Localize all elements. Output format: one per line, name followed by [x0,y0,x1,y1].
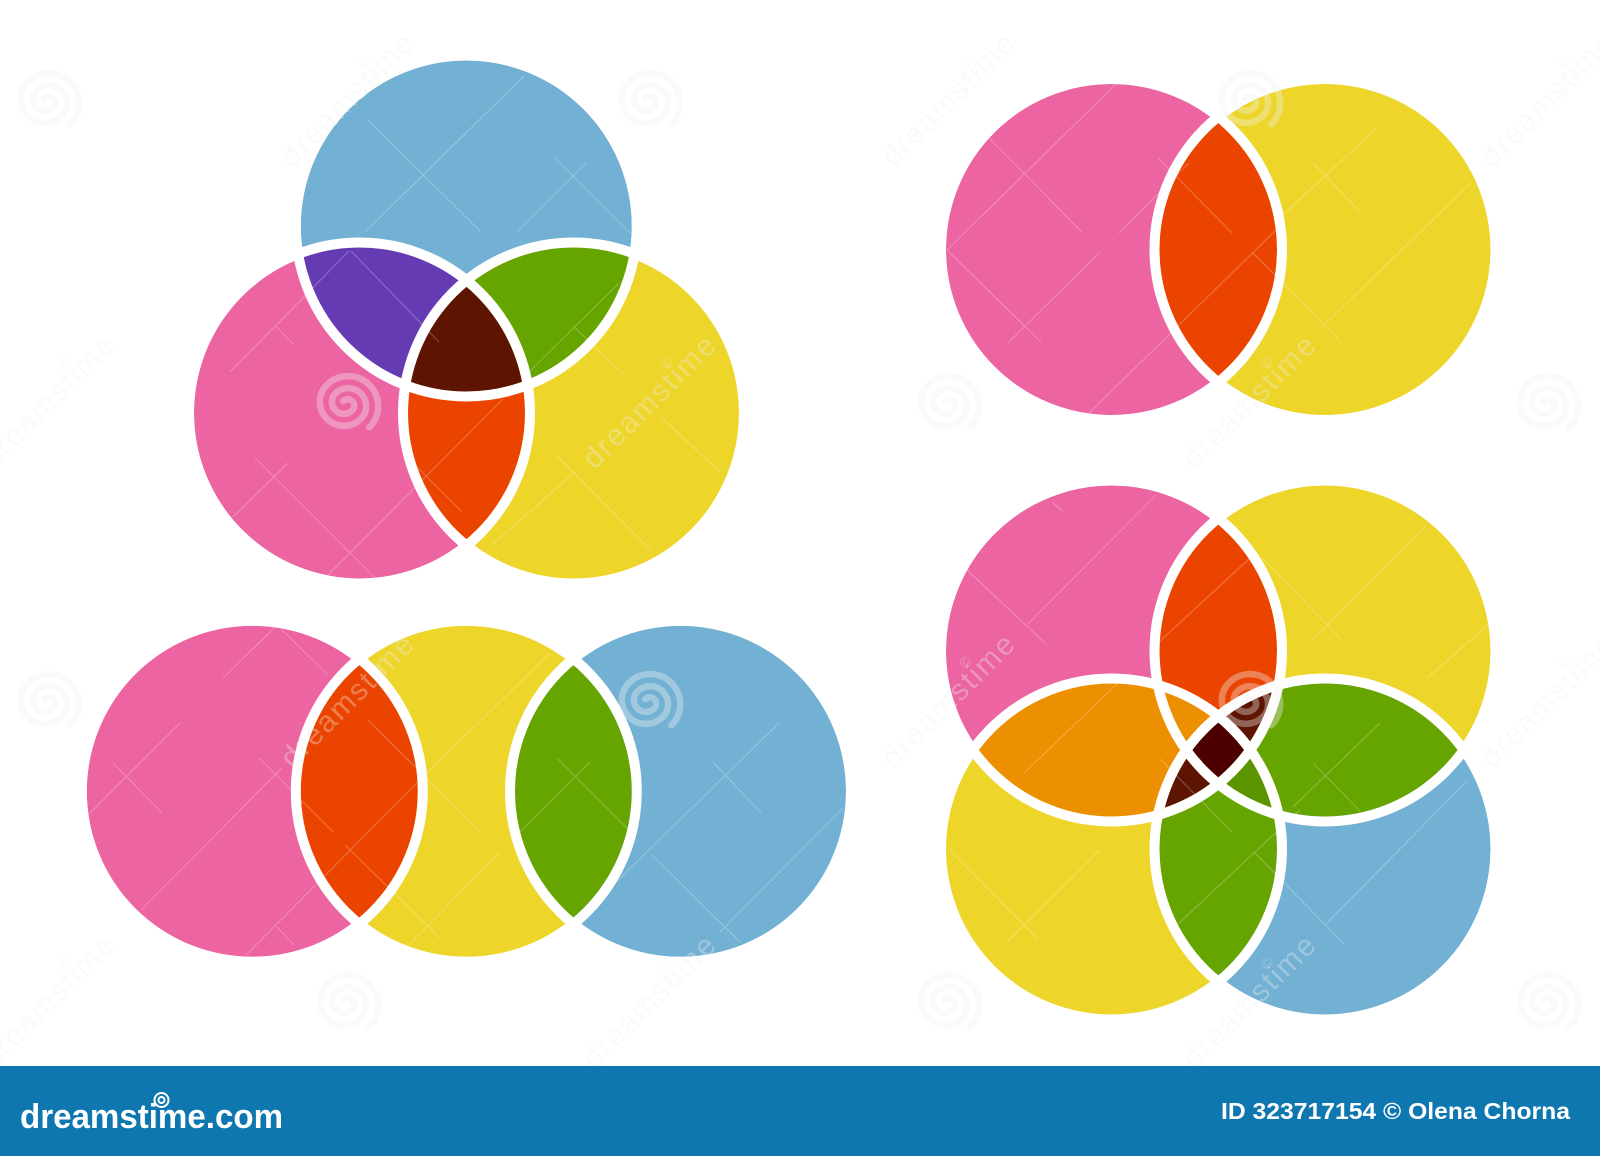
red-orange overlap [1160,123,1277,376]
red-orange overlap [408,287,525,539]
blue circle [301,60,632,392]
watermark text: dreamstime [576,329,722,475]
footer logo [20,1093,283,1136]
pink circle [946,84,1277,415]
green overlap [515,665,632,918]
watermark text: dreamstime [274,628,420,774]
watermark text: © [956,652,976,672]
yellow circle [408,248,739,578]
logo wordmark: dreamstime.com [20,1098,283,1136]
pink circle [87,626,418,957]
four-circle Venn diagram [941,480,1496,1020]
watermark text: dreamstime [1176,929,1322,1075]
watermark text: © [56,953,76,973]
footer banner [0,1066,1600,1156]
yellow circle [1160,84,1490,415]
watermark text: dreamstime [1176,329,1322,475]
watermark text: © [657,953,677,973]
watermark text: dreamstime [875,27,1021,173]
right green overlap [1226,684,1458,816]
south-east dark green overlap [1192,722,1272,808]
watermark text: dreamstime [274,27,420,173]
three-circle triangular Venn diagram [189,56,744,584]
watermark lines [90,76,1489,955]
watermark text: © [657,353,677,373]
green overlap [411,248,629,381]
south-west brown overlap [1165,750,1218,808]
watermark text: © [956,51,976,71]
watermark text: © [1555,652,1575,672]
watermark text: © [355,652,375,672]
north-east brown overlap [1218,692,1272,749]
bottom-right blue circle [1160,684,1490,1014]
top-left pink circle [946,486,1277,816]
watermark text: © [1555,51,1575,71]
north-west orange overlap [1166,692,1243,776]
logo spiral icon [154,1093,168,1107]
watermark text: © [56,353,76,373]
three-circle row Venn diagram [82,621,851,962]
purple overlap [304,248,466,380]
watermark text: dreamstime [576,929,722,1075]
red-orange overlap [300,665,418,918]
pink circle [194,248,525,578]
watermark text: dreamstime [875,628,1021,774]
top-right yellow circle [1160,486,1490,816]
left orange overlap [979,684,1209,816]
watermark text: © [1257,953,1277,973]
top red-orange overlap [1160,524,1277,716]
two-circle Venn diagram [941,79,1496,420]
yellow circle [301,626,632,957]
watermark text: © [1257,353,1277,373]
bottom green overlap [1160,758,1277,976]
image credit: ID 323717154 © Olena Chorna [1221,1098,1571,1124]
blue circle [515,626,846,957]
watermark text: © [355,51,375,71]
bottom-left yellow circle [946,684,1277,1014]
dark centre overlap [411,287,522,392]
centre dark overlap [1192,722,1244,778]
